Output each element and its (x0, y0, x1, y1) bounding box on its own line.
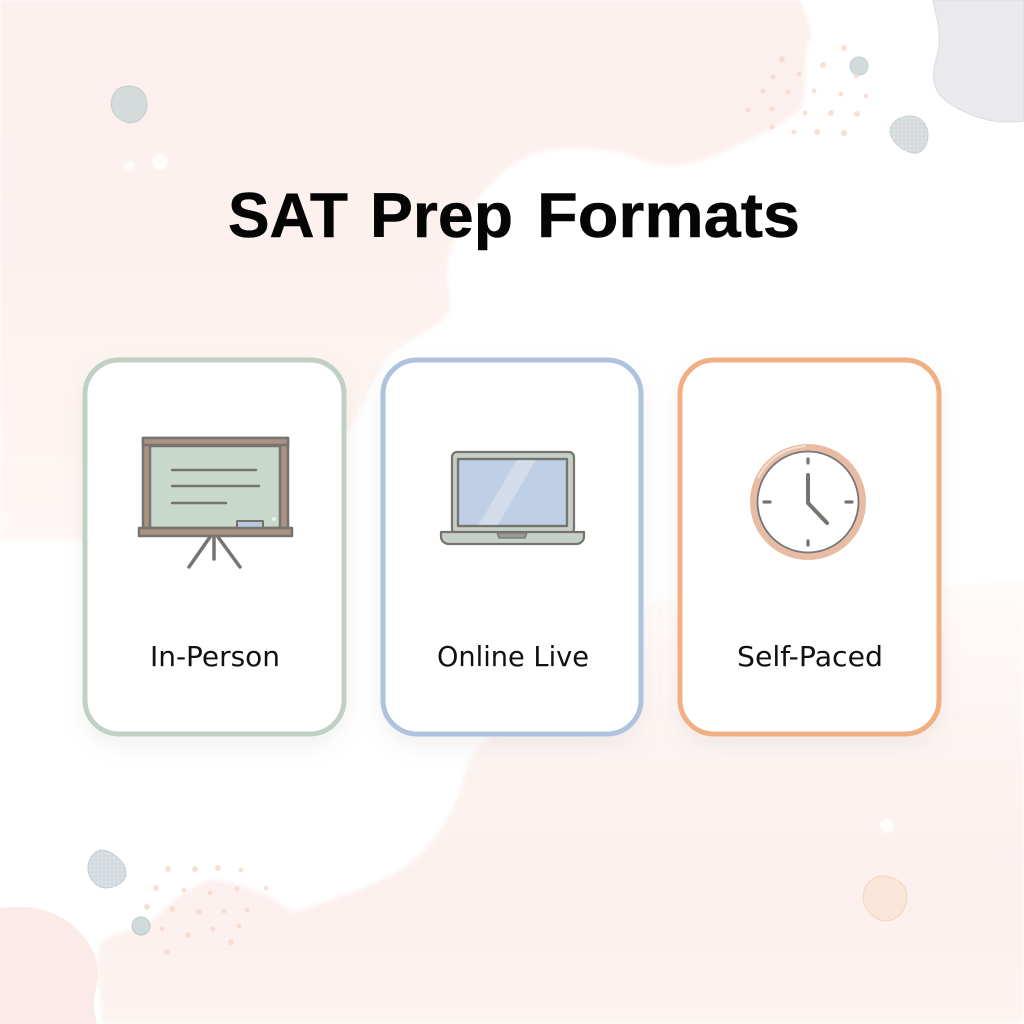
icon: chalkboard (139, 438, 292, 567)
background blob: top-right grey (933, 0, 1024, 122)
label: Self-Paced: Self-Paced (737, 641, 883, 673)
card frame (680, 360, 939, 734)
card frame (383, 360, 641, 734)
title: Prep (370, 181, 513, 251)
icon: laptop (441, 452, 584, 544)
panel: Self-Paced (680, 360, 939, 734)
decorative pebbles and dots (88, 45, 928, 955)
panel: In-Person (85, 360, 344, 734)
title (228, 181, 800, 251)
background wash: top-left pink (0, 0, 811, 540)
background wash: bottom-right pink (99, 580, 1024, 1024)
title: SAT (228, 181, 348, 251)
icon: clock (750, 444, 866, 560)
card frame (85, 360, 344, 734)
panel: Online Live (383, 360, 641, 734)
title: Formats (537, 181, 800, 251)
label: In-Person: In-Person (150, 641, 280, 673)
label: Online Live: Online Live (437, 641, 589, 673)
background wash: bottom-left darker pink (0, 907, 98, 1024)
